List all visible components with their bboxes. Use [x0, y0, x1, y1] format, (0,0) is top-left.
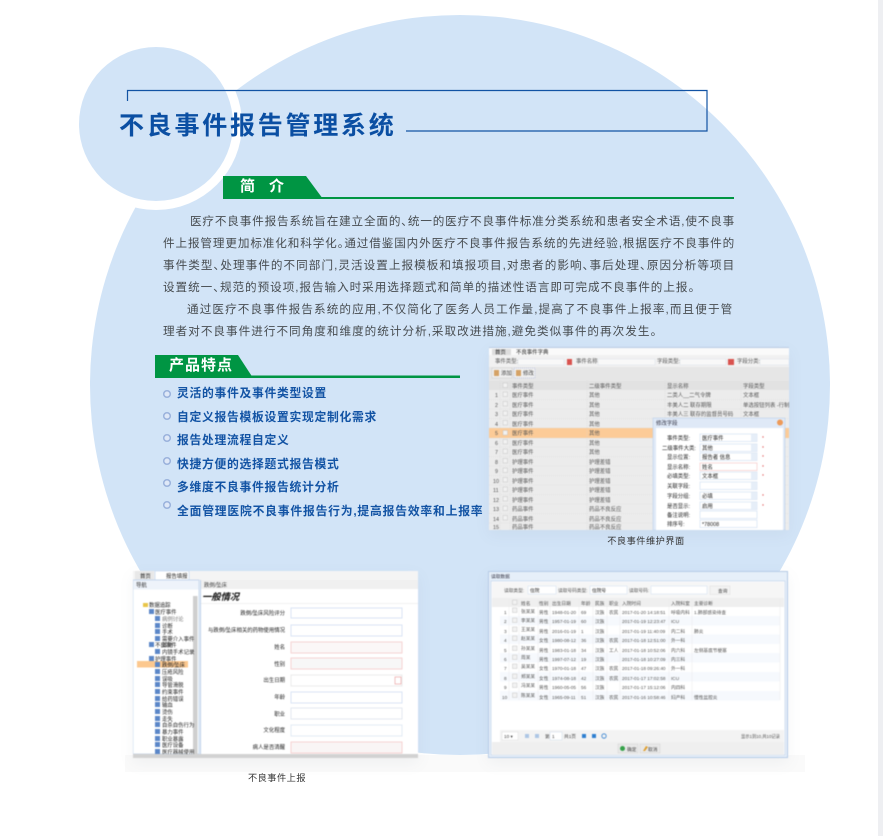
screenshot: patient data table: 5 [504, 648, 507, 653]
screenshot: event maintenance: 医疗事件 [512, 429, 534, 437]
navigation tree: 给药错误 [162, 695, 184, 703]
navigation tree: 病例讨论 [162, 615, 184, 623]
navigation tree: 输血 [162, 701, 173, 709]
screenshot: event maintenance: 单选按钮列表 -行制 [743, 401, 789, 409]
screenshot: patient data table: 民族 [595, 600, 605, 607]
navigation tree: 医疗设备 [162, 741, 184, 749]
screenshot: event reporting: 病人是否清醒 [253, 743, 286, 751]
screenshot: patient data table: 1 [581, 629, 584, 634]
screenshot: patient data table: 住院号 [592, 587, 606, 594]
screenshot: event maintenance: 药品事件 [512, 515, 534, 523]
screenshot: patient data table: 赵某某 [521, 635, 535, 642]
screenshot: event maintenance: 添加 [501, 369, 512, 377]
feature list: 全面管理医院不良事件报告行为,提高报告效率和上报率 [177, 504, 483, 518]
screenshot: event maintenance: 护理差错 [589, 496, 611, 504]
navigation tree: 跌倒/坠床 [162, 661, 186, 669]
screenshot: patient data table: 女性 [539, 675, 549, 682]
feature list: 多维度不良事件报告统计分析 [177, 480, 339, 494]
screenshot: event maintenance: 其他 [589, 401, 600, 409]
screenshot: event maintenance: 3 [495, 412, 498, 418]
screenshot: patient data table: 确定 [627, 746, 637, 753]
screenshot: event maintenance: 10 [493, 479, 499, 485]
screenshot: patient data table: 内六科 [671, 647, 685, 654]
screenshot: event maintenance: 其他 [589, 410, 600, 418]
screenshot: patient data table: 性别 [539, 600, 549, 607]
screenshot: patient data table: 1957-01-19 [552, 619, 576, 624]
screenshot: event maintenance: 医疗事件 [512, 391, 534, 399]
screenshot: event maintenance: 医疗事件 [512, 410, 534, 418]
screenshot: patient data table: 姓名 [521, 600, 530, 607]
modal dialog: 显示名称: [667, 463, 690, 471]
modal dialog: 二级事件大类: [662, 444, 696, 452]
screenshot: patient data table: 陈某某 [521, 692, 535, 699]
navigation tree: 内镜手术记录 [162, 648, 195, 656]
screenshot: patient data table: 2017-01-20 14:18:51 [622, 610, 666, 615]
screenshot: event maintenance: 其他 [589, 391, 600, 399]
modal dialog: *78008 [702, 522, 719, 528]
screenshot: patient data table [488, 571, 788, 758]
screenshot: patient data table: 农民 [609, 665, 619, 672]
screenshot: patient data table: 1 [504, 610, 507, 615]
navigation tree: 职业暴露 [162, 735, 184, 743]
screenshot: event maintenance: 13 [493, 507, 499, 513]
title frame [126, 90, 708, 132]
screenshot: patient data table: 69 [581, 610, 587, 615]
feature list: 快捷方便的选择题式报告模式 [177, 457, 339, 471]
screenshot: patient data table: 汉族 [595, 618, 605, 625]
screenshot: event maintenance: 8 [495, 460, 498, 466]
screenshot: patient data table: 8 [504, 676, 507, 681]
heading: 简介: 简介 [240, 178, 298, 195]
screenshot: patient data table: 1.肺部感染待查 [694, 609, 726, 616]
screenshot: patient data table: 男性 [539, 656, 549, 663]
bullet icons [163, 390, 171, 509]
navigation tree: 导航 [136, 581, 147, 589]
screenshot: event reporting: 首页 [140, 572, 151, 580]
screenshot: patient data table: 2017-01-18 10:52:06 [622, 648, 666, 653]
screenshot: event maintenance: 字段类型 [743, 382, 765, 390]
screenshot: event maintenance: 9 [495, 469, 498, 475]
title: 不良事件报告管理系统 [119, 112, 397, 140]
screenshot: patient data table: 汉族 [595, 665, 605, 672]
screenshot: event reporting: 跌倒/坠床风险评分 [240, 609, 286, 617]
screenshot: patient data table: 汉族 [595, 609, 605, 616]
modal dialog: 文本框 [702, 472, 719, 480]
screenshot: patient data table: 51 [581, 695, 587, 700]
screenshot: event maintenance: 护理差错 [589, 486, 611, 494]
navigation tree: 自杀自伤行为 [162, 721, 194, 729]
screenshot: event maintenance: 文本框 [743, 410, 760, 418]
screenshot: patient data table: 2017-01-16 10:58:46 [622, 695, 666, 700]
screenshot: patient data table: 农民 [609, 609, 619, 616]
screenshot: event maintenance: 5 [495, 431, 498, 437]
screenshot: patient data table: 汉族 [595, 656, 605, 663]
feature list [163, 386, 483, 518]
intro text block: 设置统一、规范的预设项,报告输入时采用选择题式和简单的描述性语言即可完成不良事件的上报。 [163, 281, 695, 294]
screenshot: event maintenance: 护理事件 [512, 477, 534, 485]
screenshot: patient data table: 2017-01-19 12:23:47 [622, 619, 666, 624]
screenshot: patient data table: 男性 [539, 628, 549, 635]
screenshot: patient data table: 农民 [609, 694, 619, 701]
screenshot: event maintenance: 14 [493, 517, 499, 523]
screenshot: patient data table: 1960-05-05 [552, 685, 576, 690]
screenshot: event maintenance: 护理差错 [589, 467, 611, 475]
modal dialog: 事件类型: [667, 434, 690, 442]
screenshot: patient data table: 入院时间 [622, 600, 641, 607]
screenshot: event maintenance: 事件类型: [495, 357, 518, 365]
screenshot: patient data table: 3 [504, 629, 507, 634]
screenshot: event maintenance: 修改 [523, 369, 534, 377]
screenshot: patient data table: 工人 [609, 648, 619, 653]
screenshot: patient data table: 呼吸内科 [671, 609, 690, 616]
modal dialog: 修改字段 [656, 419, 678, 427]
screenshot: event maintenance: 护理事件 [512, 467, 534, 475]
modal dialog: 医疗事件 [702, 434, 724, 442]
pager: 10 ▾ [504, 734, 514, 739]
screenshot: patient data table: 2017-01-18 12:51:00 [622, 638, 666, 643]
screenshot: patient data table: 47 [581, 666, 587, 671]
screenshot: event reporting: 性别 [274, 660, 285, 668]
screenshot: patient data table: 女性 [539, 637, 549, 644]
screenshot: patient data table: ICU [671, 676, 680, 681]
screenshot: event maintenance: 二类人__二气令牌 [667, 391, 711, 399]
screenshot: patient data table: 女性 [539, 665, 549, 672]
screenshot: patient data table: 肺炎 [694, 629, 704, 635]
modal dialog: 备注说明: [667, 511, 690, 519]
screenshot: patient data table: 住院 [530, 587, 540, 594]
screenshot: patient data table: 2 [504, 619, 507, 624]
screenshot: patient data table: 7 [504, 666, 507, 671]
screenshot: patient data table: 1980-08-12 [552, 638, 576, 643]
screenshot: event maintenance: 7 [495, 450, 498, 456]
screenshot: patient data table: 职业 [609, 600, 619, 607]
screenshot: patient data table: 慢性盆腔炎 [694, 694, 718, 701]
screenshot: patient data table: 张某某 [521, 608, 535, 615]
navigation tree: 其他 [162, 641, 173, 649]
screenshot: patient data table: 34 [581, 648, 587, 653]
screenshot: event maintenance: 文本框 [743, 391, 760, 399]
feature list: 报告处理流程自定义 [177, 433, 289, 447]
navigation tree: 护理事件 [155, 655, 177, 663]
navigation tree: 约束事件 [162, 688, 184, 696]
screenshot: patient data table: 60 [581, 619, 587, 624]
modal dialog: 显示位置: [667, 453, 690, 461]
intro text block: 通过医疗不良事件报告系统的应用,不仅简化了医务人员工作量,提高了不良事件上报率,而且便于管 [187, 303, 733, 316]
intro text block: 医疗不良事件报告系统旨在建立全面的、统一的医疗不良事件标准分类系统和患者安全术语,使不良事 [190, 215, 735, 228]
screenshot: patient data table: 男性 [539, 647, 549, 654]
heading: 产品特点 [155, 355, 460, 378]
navigation tree: 走失 [162, 715, 173, 723]
navigation tree: 导管滑脱 [162, 681, 184, 689]
navigation tree: 暴力事件 [162, 728, 184, 736]
screenshot: event reporting: 姓名 [274, 643, 285, 651]
screenshot: patient data table: 读取号码类型: [558, 587, 587, 594]
screenshot: event reporting [133, 571, 418, 758]
navigation tree: 不良事件 [155, 641, 177, 649]
screenshot: event maintenance: 1 [495, 393, 498, 399]
modal dialog: 必填 [702, 492, 713, 500]
screenshot: patient data table: 左侧基底节梗塞 [694, 647, 727, 654]
screenshot: patient data table: 汉族 [595, 637, 605, 644]
screenshot: patient data table: 1997-07-12 [552, 657, 576, 662]
screenshot: patient data table: 外一科 [671, 637, 685, 644]
screenshot: patient data table: 外一科 [671, 665, 685, 672]
screenshot: patient data table: 孙某某 [521, 645, 535, 652]
navigation tree: 诊断 [162, 622, 173, 630]
modal dialog: 关联字段: [667, 482, 690, 490]
screenshot: event maintenance: 医疗事件 [512, 420, 534, 428]
screenshot: event maintenance: 其他 [589, 439, 600, 447]
screenshot: event maintenance: 医疗事件 [512, 439, 534, 447]
screenshot: patient data table: 主要诊断 [694, 600, 713, 607]
screenshot: patient data table: 年龄 [581, 600, 591, 607]
screenshot: patient data table: 读取类型: [504, 587, 524, 594]
screenshot: patient data table: 6 [504, 657, 507, 662]
screenshot: event maintenance: 丰美人二 联存期限 [667, 401, 712, 409]
navigation tree: 医疗器械使用 [162, 748, 194, 756]
navigation tree: 医疗事件 [155, 608, 177, 616]
screenshot: patient data table: 冯某某 [521, 682, 535, 689]
screenshot: patient data table: 19 [581, 657, 587, 662]
screenshot: patient data table: 56 [581, 685, 587, 690]
screenshot: event maintenance: 不良事件字典 [516, 348, 549, 356]
intro text block: 理者对不良事件进行不同角度和维度的统计分析,采取改进措施,避免类似事件的再次发生。 [163, 325, 657, 338]
screenshot: patient data table: 1965-09-11 [552, 695, 576, 700]
screenshot: event reporting: 跌倒/坠床 [204, 581, 228, 589]
modal dialog: 启用 [702, 502, 713, 510]
screenshot: patient data table: ICU [671, 619, 680, 624]
screenshot: patient data table: 42 [581, 676, 587, 681]
screenshot: event maintenance: 显示名称 [667, 382, 689, 390]
screenshot: event maintenance: 护理事件 [512, 496, 534, 504]
screenshot: patient data table: 内二科 [671, 628, 685, 635]
navigation tree: 数据追踪 [149, 601, 171, 609]
screenshot: patient data table: 2017-01-18 10:27:09 [622, 657, 666, 662]
screenshot: patient data table: 1983-01-18 [552, 648, 576, 653]
screenshot: event reporting: 出生日期 [263, 676, 285, 684]
screenshot: event reporting: 与跌倒/坠床相关的药物使用情况 [208, 626, 286, 634]
screenshot: event maintenance: 丰美人三 联存的监督员号码 [667, 410, 734, 418]
screenshot: patient data table: 2017-01-19 11:40:09 [622, 629, 666, 634]
screenshot: patient data table: 查询 [718, 588, 728, 594]
screenshot: patient data table: 入院科室 [671, 600, 690, 607]
screenshot: event maintenance: 二级事件类型 [589, 382, 622, 390]
modal dialog: 必填类型: [667, 472, 690, 480]
pager: 第 [545, 733, 550, 740]
caption: event reporting: 不良事件上报 [248, 773, 306, 783]
screenshot: event maintenance: 护理事件 [512, 486, 534, 494]
screenshot: event maintenance: 事件类型 [512, 382, 534, 390]
screenshot: patient data table: 吴某某 [521, 664, 535, 670]
navigation tree: 压疮风险 [162, 668, 184, 676]
screenshot: patient data table: 男性 [539, 618, 549, 625]
screenshot: patient data table: 汉族 [595, 684, 605, 691]
navigation tree: 手术 [162, 628, 173, 636]
modal dialog: 字段分组: [667, 492, 690, 500]
screenshot: patient data table: 10 [502, 695, 508, 700]
screenshot: event maintenance: 药品不良反应 [589, 515, 622, 523]
screenshot: patient data table: 妇产科 [671, 694, 685, 701]
screenshot: patient data table: 读取数据 [491, 573, 510, 580]
screenshot: event maintenance: 字段分类: [737, 357, 760, 365]
navigation tree: 烫伤 [162, 708, 173, 716]
screenshot: patient data table: 周某 [521, 655, 531, 661]
screenshot: patient data table: 取消 [648, 746, 658, 753]
modal dialog: 报告者 信息 [702, 453, 731, 461]
screenshot: event reporting: 文化程度 [263, 726, 286, 734]
screenshot: patient data table: 王某某 [521, 627, 535, 633]
modal dialog: 姓名 [702, 463, 713, 471]
screenshot: event maintenance: 11 [493, 488, 499, 494]
screenshot: event maintenance: 其他 [589, 448, 600, 456]
screenshot: event maintenance: 护理事件 [512, 458, 534, 466]
screenshot: event maintenance: 护理差错 [589, 477, 611, 485]
screenshot: patient data table: 李某某 [521, 617, 535, 624]
screenshot: event maintenance: 医疗事件 [512, 448, 534, 456]
screenshot: patient data table: 农民 [609, 637, 619, 644]
screenshot: event maintenance: 医疗事件 [512, 401, 534, 409]
screenshot: patient data table: 2017-01-17 15:12:06 [622, 685, 666, 690]
heading: 简介 [223, 176, 734, 199]
screenshot: event maintenance: 其他 [589, 420, 600, 428]
pager: 1 [552, 734, 555, 739]
modal dialog: 排序号: [667, 520, 685, 528]
screenshot: event reporting: 一般情况 [202, 592, 241, 602]
screenshot: patient data table: 读取号码: [629, 587, 649, 594]
screenshot: event maintenance: 4 [495, 422, 498, 428]
screenshot: patient data table: 2017-01-17 17:02:58 [622, 676, 666, 681]
screenshot: event maintenance: 12 [493, 498, 499, 504]
feature list: 灵活的事件及事件类型设置 [177, 386, 327, 400]
screenshot: patient data table: 1948-01-20 [552, 610, 576, 615]
screenshot: patient data table: 2016-01-19 [552, 629, 576, 634]
heading: 产品特点: 产品特点 [169, 357, 233, 374]
screenshot: patient data table: 1974-08-18 [552, 676, 576, 681]
screenshot: patient data table: 36 [581, 638, 587, 643]
screenshot: patient data table: 内四科 [671, 684, 685, 691]
screenshot: event reporting: 年龄 [274, 693, 286, 701]
screenshot: patient data table: 农民 [609, 675, 619, 682]
screenshot: patient data table: 汉族 [595, 675, 605, 682]
modal dialog: 其他 [702, 444, 713, 452]
pager: 显示1到10,共10记录 [741, 733, 781, 740]
screenshot: event maintenance: 2 [495, 403, 498, 409]
screenshot: patient data table: 内三科 [671, 656, 685, 663]
screenshot: patient data table: 郑某某 [521, 673, 535, 680]
screenshot: patient data table: 出生日期 [552, 600, 571, 607]
screenshot: patient data table: 男性 [539, 609, 549, 616]
intro text block: 件上报管理更加标准化和科学化。通过借鉴国内外医疗不良事件报告系统的先进经验,根据医疗不良事件的 [163, 237, 735, 250]
screenshot: event reporting: 报告填报 [166, 572, 188, 580]
pager: 共1页 [564, 733, 576, 740]
screenshot: event maintenance: 字段类型: [657, 357, 680, 365]
screenshot: patient data table: 9 [504, 685, 507, 690]
screenshot: event maintenance: 事件名称: [576, 357, 599, 365]
screenshot: patient data table: 女性 [539, 694, 549, 701]
feature list: 自定义报告模板设置实现定制化需求 [177, 410, 377, 424]
screenshot: event maintenance: 药品事件 [512, 505, 534, 513]
intro text block: 事件类型、处理事件的不同部门,灵活设置上报模板和填报项目,对患者的影响、事后处理、原因分析等项目 [163, 259, 735, 272]
screenshot: event maintenance: 6 [495, 441, 498, 447]
screenshot: patient data table: 男性 [539, 684, 549, 691]
screenshot: patient data table: 1970-01-18 [552, 666, 576, 671]
screenshot: patient data table: 汉族 [595, 694, 605, 701]
intro text block [163, 215, 735, 338]
modal dialog: 是否显示: [667, 503, 690, 510]
screenshot: patient data table: 4 [504, 638, 507, 643]
screenshot: patient data table: 2017-01-18 09:26:40 [622, 666, 666, 671]
screenshot: event maintenance: 首页 [495, 348, 506, 356]
screenshot: event maintenance: 其他 [589, 429, 600, 437]
caption: event maintenance: 不良事件维护界面 [607, 536, 685, 546]
screenshot: event maintenance: 护理差错 [589, 458, 611, 466]
screenshot: event reporting: 职业 [274, 710, 286, 718]
navigation tree: 误吸 [162, 675, 173, 683]
navigation tree [133, 580, 199, 756]
pager [500, 730, 784, 742]
screenshot: event maintenance: 药品不良反应 [589, 505, 622, 513]
screenshot: patient data table: 汉族 [595, 628, 605, 635]
screenshot: event maintenance [489, 347, 789, 530]
modal dialog [653, 418, 785, 530]
screenshot: patient data table: 汉族 [595, 647, 605, 654]
navigation tree: 需要介入事件 [162, 635, 195, 643]
